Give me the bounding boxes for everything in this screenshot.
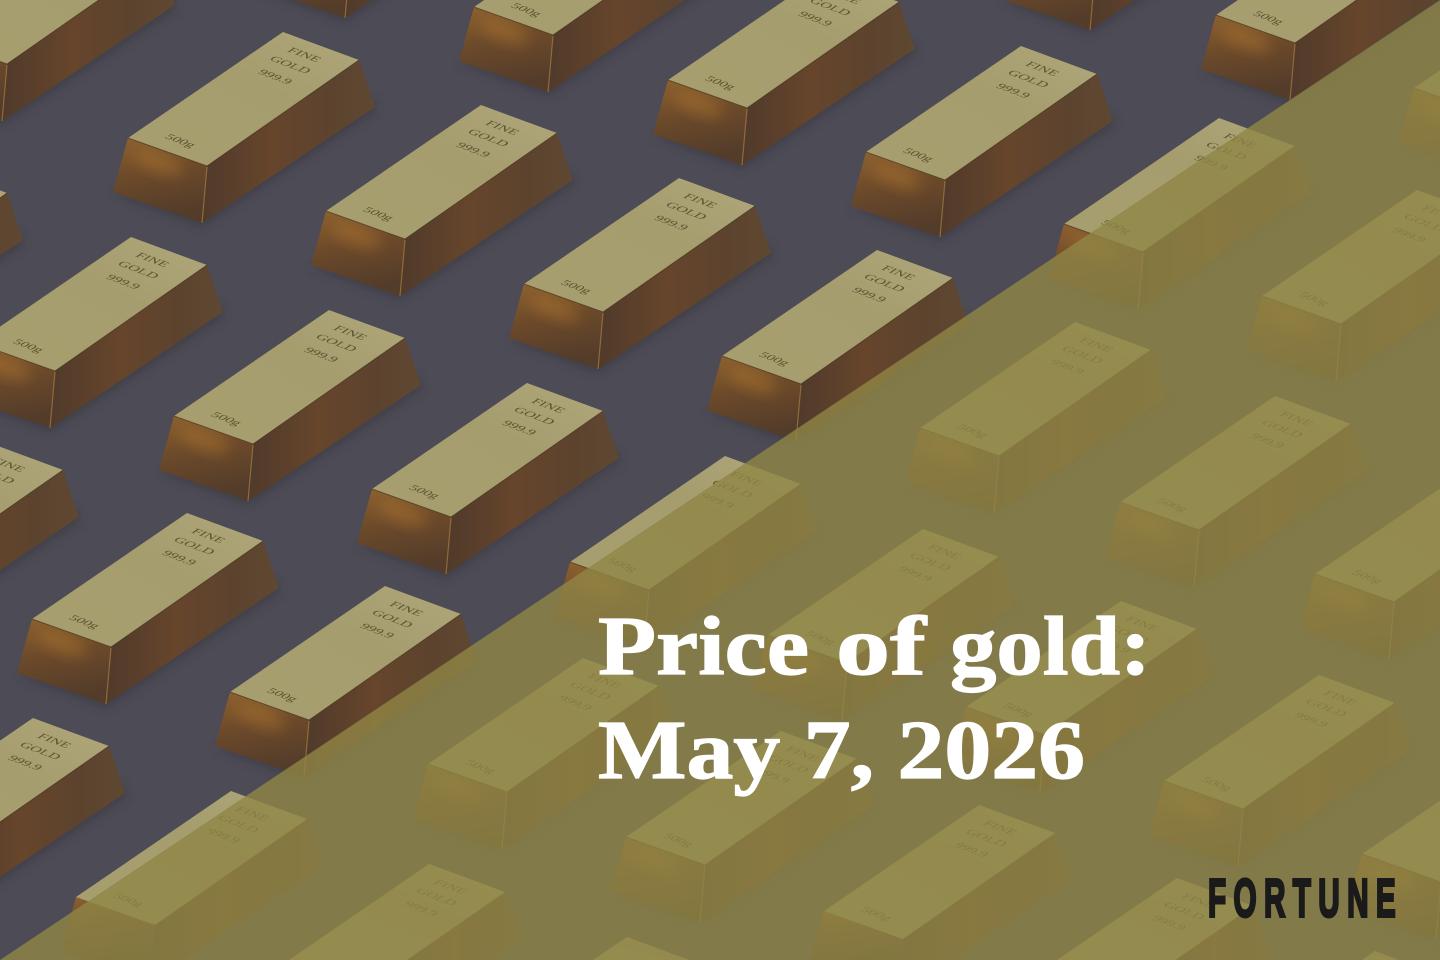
Fortune logo: FORTUNE [1208,869,1403,929]
gold bars grid: 999.9 [1093,637,1134,655]
gold bars grid: 500g [406,483,443,500]
title [598,600,1151,797]
gold bars grid: 999.9 [993,82,1034,100]
gold bars grid: 999.9 [5,754,46,772]
gold bars grid: FINE [482,119,523,137]
gold bars grid: 500g [264,686,301,703]
gold bars grid: 500g [66,613,103,630]
gold bars grid: GOLD [764,753,812,774]
gold bars grid: GOLD [708,478,756,499]
gold bars grid: 999.9 [453,141,494,159]
gold bars grid: FINE [980,819,1021,837]
gold bars grid: 999.9 [203,827,244,845]
gold bars grid: GOLD [1202,140,1250,161]
gold bars grid: 500g [954,422,991,439]
gold bars grid: 999.9 [1291,711,1332,729]
gold bars grid: GOLD [16,740,64,761]
gold bars grid: FINE [528,397,569,415]
gold bars grid: 999.9 [951,841,992,859]
gold bars grid: 999.9 [1247,432,1288,450]
title: of [836,600,927,693]
gold bars grid: 999.9 [159,549,200,567]
title: May 7, 2026 [598,704,1085,797]
gold bars grid: 500g [1250,9,1287,26]
gold bars grid: 500g [360,205,397,222]
gold bars grid: FINE [284,46,325,64]
gold bars grid: 500g [558,278,595,295]
gold bars grid: GOLD [214,813,262,834]
gold bars grid: 999.9 [795,10,836,28]
gold bars grid: 500g [702,74,739,91]
gold bars grid: GOLD [1258,418,1306,439]
gold bars grid: GOLD [266,54,314,75]
gold bars grid: 999.9 [849,286,890,304]
gold bars grid: 500g [110,891,147,908]
gold bars grid: 999.9 [1149,914,1190,932]
gold bars grid: FINE [878,264,919,282]
gold bars grid: 500g [462,758,499,775]
gold bars grid: 999.9 [255,68,296,86]
gold bars grid: GOLD [412,886,460,907]
gold bars grid: GOLD [170,535,218,556]
gold bars grid: FINE [430,878,471,896]
gold bars grid: GOLD [860,272,908,293]
gold bars grid: 500g [604,556,641,573]
gold bars grid: FINE [1122,615,1163,633]
gold bars grid: 500g [756,350,793,367]
gold bars grid: 999.9 [555,694,596,712]
gold bars grid: 999.9 [651,214,692,232]
gold bars grid: 500g [660,831,697,848]
gold bars grid: 999.9 [357,622,398,640]
gold bars grid: FINE [680,192,721,210]
gold bars grid: FINE [1178,892,1219,910]
gold bars grid: 999.9 [301,346,342,364]
gold bars grid: 500g [1000,701,1037,718]
gold bars grid: 500g [10,337,47,354]
gold bars grid: FINE [584,672,625,690]
gold bars grid: 500g [508,1,545,18]
gold bars grid: GOLD [1160,900,1208,921]
gold bars grid: 999.9 [1389,226,1430,244]
gold bars grid: GOLD [114,259,162,280]
gold bars grid: 999.9 [499,419,540,437]
gold bars grid: GOLD [368,608,416,629]
gold bars grid: 500g [900,146,937,163]
gold bars grid: GOLD [566,680,614,701]
gold bars grid: 500g [802,629,839,646]
gold bars grid: FINE [232,805,273,823]
gold bars grid: FINE [1076,336,1117,354]
gold bars grid: 999.9 [753,767,794,785]
gold bars grid: FINE [188,527,229,545]
gold bars grid: 999.9 [401,900,442,918]
gold bars grid: FINE [386,600,427,618]
gold bars grid: 500g [1198,775,1235,792]
gold bars grid: 500g [1098,218,1135,235]
gold bars grid: FINE [34,732,75,750]
gold bars grid: GOLD [312,332,360,353]
gold bars grid: 999.9 [1191,154,1232,172]
gold bars grid: FINE [726,470,767,488]
gold bars grid: FINE [1022,60,1063,78]
gold bars grid: 500g [858,905,895,922]
gold bars grid: GOLD [1302,697,1350,718]
gold bars grid: GOLD [1104,623,1152,644]
gold bars grid: FINE [132,251,173,269]
gold bars grid: GOLD [1058,344,1106,365]
gold bars grid: GOLD [510,405,558,426]
gold bars grid: 999.9 [697,492,738,510]
gold bars grid: 999.9 [895,565,936,583]
gold bars grid: 999.9 [103,273,144,291]
gold bars grid: 500g [162,132,199,149]
gold bars grid: FINE [1220,132,1261,150]
gold bars grid: GOLD [464,127,512,148]
gold bars grid: FINE [1276,410,1317,428]
gold bars grid: FINE [330,324,371,342]
gold bars grid: 500g [1296,290,1333,307]
title: gold: [950,600,1151,693]
gold bars grid: 500g [208,410,245,427]
gold bars grid: GOLD [906,551,954,572]
gold bars grid: 500g [1154,496,1191,513]
gold bars grid: FINE [782,745,823,763]
gold bars grid: FINE [1320,689,1361,707]
gold bars grid: FINE [924,543,965,561]
gold bars grid: GOLD [962,827,1010,848]
gold bars grid: 500g [1349,568,1386,585]
gold bars grid: GOLD [662,200,710,221]
gold bars grid: GOLD [1004,68,1052,89]
gold bars grid: 999.9 [1047,358,1088,376]
title: Price [598,600,809,693]
